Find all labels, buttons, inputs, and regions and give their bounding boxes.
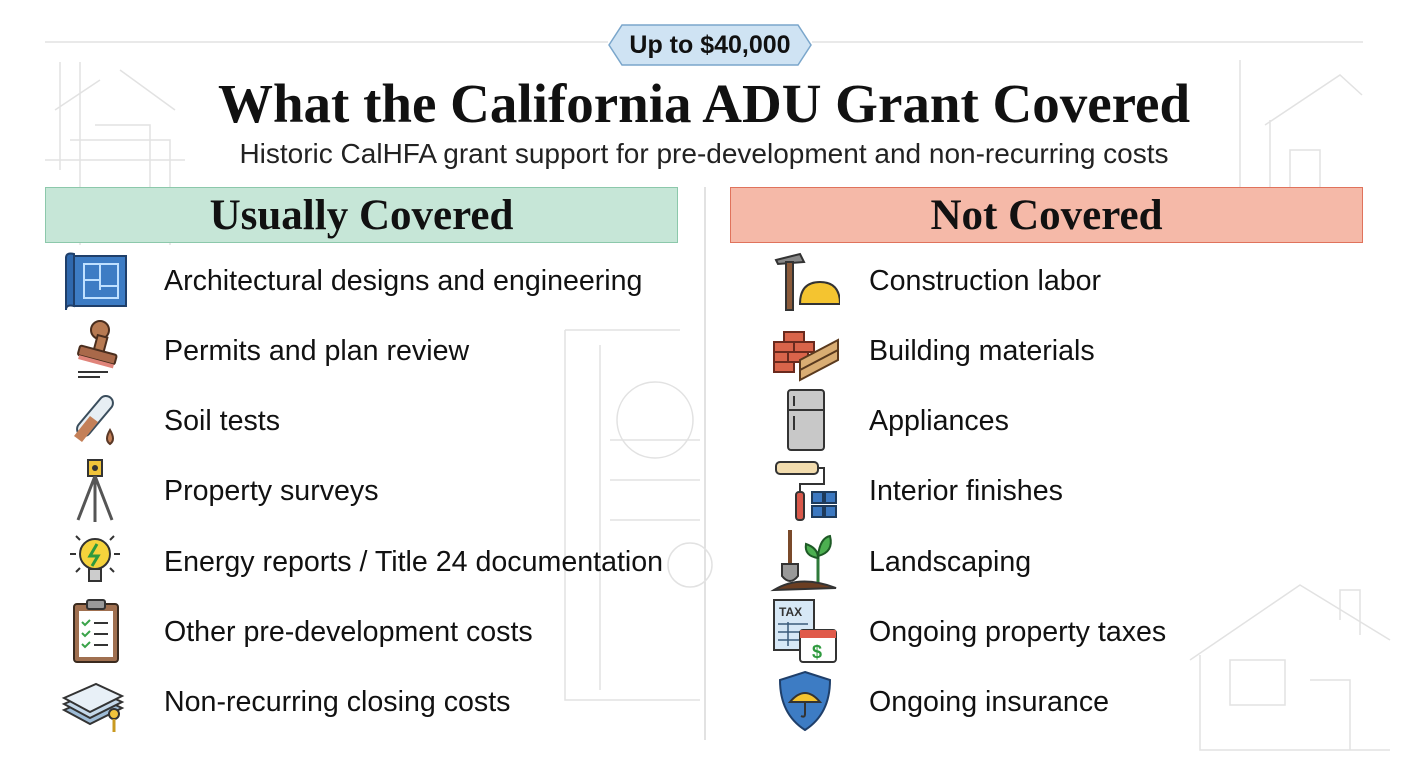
icon: shield with umbrella [779, 671, 831, 732]
icon: stamp [77, 320, 118, 378]
icon: blueprint [65, 252, 127, 310]
icon: tax doc and calendar: TAX [779, 605, 802, 619]
text: Soil tests [164, 405, 280, 437]
icon: tax doc and calendar [773, 599, 837, 663]
text: Appliances [869, 405, 1009, 437]
panel: covered list [62, 252, 663, 732]
text: Ongoing property taxes [869, 616, 1166, 648]
icon: papers and keys [62, 682, 124, 732]
text: Energy reports / Title 24 documentation [164, 546, 663, 578]
icon: shovel and plant [770, 530, 836, 592]
header: Not Covered: Not Covered [930, 192, 1163, 239]
text: Building materials [869, 335, 1095, 367]
text: Ongoing insurance [869, 686, 1109, 718]
text: Architectural designs and engineering [164, 265, 642, 297]
badge: Up to $40,000 [608, 24, 812, 66]
text: Permits and plan review [164, 335, 469, 367]
icon: light bulb [70, 535, 120, 582]
icon: bricks and wood [773, 331, 839, 382]
subtitle: Historic CalHFA grant support for pre-development and non-recurring costs [239, 138, 1169, 169]
icon: paint roller and tiles [775, 461, 837, 521]
icon: refrigerator [787, 389, 825, 451]
icon: clipboard [73, 599, 119, 663]
text: Non-recurring closing costs [164, 686, 510, 718]
icon: tax doc and calendar: $ [812, 642, 822, 662]
header: Usually Covered [45, 187, 678, 243]
header: Usually Covered: Usually Covered [210, 192, 513, 239]
text: Property surveys [164, 475, 379, 507]
icon: hammer and hard hat [774, 252, 840, 311]
text: Other pre-development costs [164, 616, 533, 648]
title: What the California ADU Grant Covered [218, 73, 1190, 134]
header: Not Covered [730, 187, 1363, 243]
text: Construction labor [869, 265, 1101, 297]
icon: survey tripod [76, 459, 114, 522]
icon: test tube [74, 395, 114, 446]
badge: Up to $40,000: Up to $40,000 [629, 31, 791, 59]
panel: not covered list [770, 252, 1166, 732]
text: Landscaping [869, 546, 1031, 578]
text: Interior finishes [869, 475, 1063, 507]
